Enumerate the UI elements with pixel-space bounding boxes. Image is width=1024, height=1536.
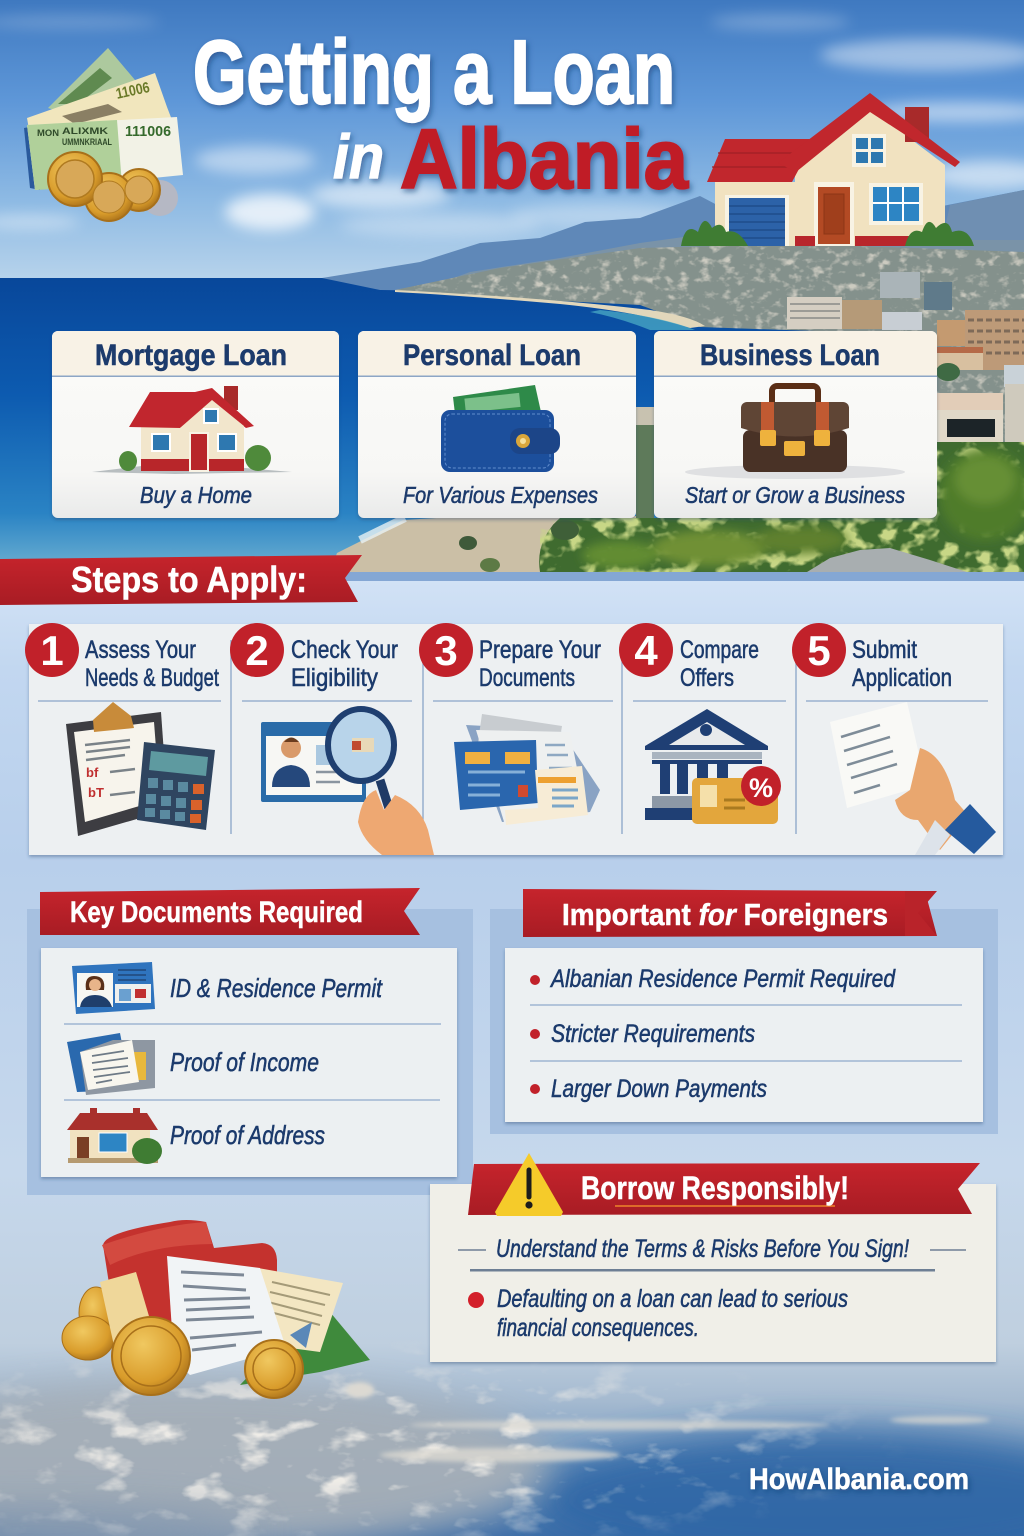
- icon: banknotes and coins: [24, 48, 183, 221]
- step 4: Compare: [680, 636, 759, 664]
- step 3: 3: [434, 627, 458, 674]
- step 2: Check Your: [291, 636, 398, 664]
- icon: warning triangle: [495, 1153, 563, 1216]
- bullet: down payments: Larger Down Payments: [551, 1075, 767, 1103]
- heading: mortgage loan: Mortgage Loan: [95, 339, 287, 372]
- banner: key documents: Key Documents Required: [70, 896, 363, 929]
- panel: personal loan: [358, 331, 636, 518]
- banner: steps to apply: [0, 555, 362, 605]
- step 1: [25, 623, 219, 692]
- subtitle: start or grow: Start or Grow a Business: [685, 482, 905, 508]
- icon: banknotes and coins: 11006: [114, 79, 151, 103]
- panel: mortgage loan: [52, 331, 339, 518]
- step 5: Application: [852, 664, 952, 692]
- background: clouds: [0, 14, 1024, 237]
- step 5: [792, 623, 952, 692]
- icon: banknotes and coins: UMMNKRIAAL: [62, 137, 112, 147]
- bullet: residence permit: Albanian Residence Permit Required: [549, 965, 896, 993]
- step 1: Assess Your: [85, 636, 196, 664]
- icon: bank and card: %: [749, 773, 773, 803]
- icon: large house: [681, 93, 974, 246]
- icon: clipboard and calculator: bf: [86, 765, 99, 780]
- row: address: Proof of Address: [170, 1120, 325, 1150]
- panel: key documents: [27, 888, 473, 1195]
- icon: banknotes and coins: 111006: [125, 123, 171, 140]
- step 3: [419, 623, 601, 692]
- subtitle: buy a home: Buy a Home: [140, 482, 252, 508]
- bullet: defaulting: Defaulting on a loan can lead to serious: [497, 1285, 848, 1313]
- step 2: [230, 623, 398, 692]
- panel: borrow responsibly: [430, 1153, 996, 1362]
- subtitle: various expenses: For Various Expenses: [403, 482, 598, 508]
- row: address: [67, 1108, 325, 1164]
- panel: steps: [25, 623, 1003, 855]
- icon: money, papers and coins: [62, 1220, 370, 1398]
- icon: ID and magnifying glass: [261, 709, 434, 855]
- step 1: 1: [40, 627, 64, 674]
- icon: wallet: [441, 385, 560, 472]
- title word: Albania: Albania: [400, 112, 689, 206]
- bullet: defaulting: [468, 1285, 848, 1342]
- step 2: Eligibility: [291, 664, 378, 692]
- bullet: stricter requirements: Stricter Requirements: [551, 1020, 755, 1048]
- title word: in: in: [333, 123, 384, 192]
- row: id: ID & Residence Permit: [170, 973, 383, 1003]
- background: lower section: [0, 572, 1024, 1536]
- background: coastal town: [395, 244, 1024, 450]
- heading: personal loan: Personal Loan: [403, 339, 581, 372]
- banner: key documents: [40, 888, 420, 935]
- step 5: Submit: [852, 636, 917, 664]
- icon: banknotes and coins: ALIXMK: [62, 126, 109, 136]
- icon: bank and card: [645, 709, 781, 824]
- icon: banknotes and coins: MON: [37, 128, 59, 138]
- step 4: [619, 623, 759, 692]
- banner: foreigners: [523, 889, 937, 937]
- background: sky: [0, 0, 1024, 290]
- heading: steps to apply: Steps to Apply:: [71, 559, 307, 600]
- step 3: Prepare Your: [479, 636, 601, 664]
- icon: clipboard and calculator: [66, 702, 215, 836]
- banner: borrow responsibly: [468, 1163, 980, 1215]
- heading: business loan: Business Loan: [700, 339, 880, 372]
- background: mountains: [322, 190, 1024, 320]
- step 4: Offers: [680, 664, 734, 692]
- row: income: [67, 1033, 319, 1095]
- icon: hand with document: [830, 702, 996, 855]
- step 4: 4: [634, 627, 658, 674]
- row: id: [72, 962, 383, 1014]
- text: understand terms: Understand the Terms & Risks Before You Sign!: [496, 1235, 909, 1263]
- step 3: Documents: [479, 664, 575, 692]
- background: sea: [0, 278, 1024, 572]
- step 2: 2: [245, 627, 269, 674]
- icon: documents: [454, 714, 600, 825]
- step 1: Needs & Budget: [85, 664, 219, 692]
- background: beach and greenery: [330, 407, 1024, 572]
- icon: briefcase: [685, 386, 905, 479]
- icon: clipboard and calculator: bT: [88, 785, 104, 800]
- icon: house: [92, 386, 292, 474]
- title: [193, 23, 689, 206]
- panel: business loan: [654, 331, 937, 518]
- footer: website: HowAlbania.com: [749, 1463, 969, 1496]
- banner: foreigners: Important for Foreigners: [562, 897, 888, 932]
- panel: important for foreigners: [490, 889, 998, 1134]
- title line 1: Getting a Loan: [193, 23, 675, 123]
- bullet: defaulting: financial consequences.: [497, 1314, 699, 1342]
- step 5: 5: [807, 627, 831, 674]
- banner: borrow responsibly: Borrow Responsibly!: [581, 1170, 849, 1206]
- background: bottom clouds: [0, 1366, 1024, 1536]
- row: income: Proof of Income: [170, 1047, 319, 1077]
